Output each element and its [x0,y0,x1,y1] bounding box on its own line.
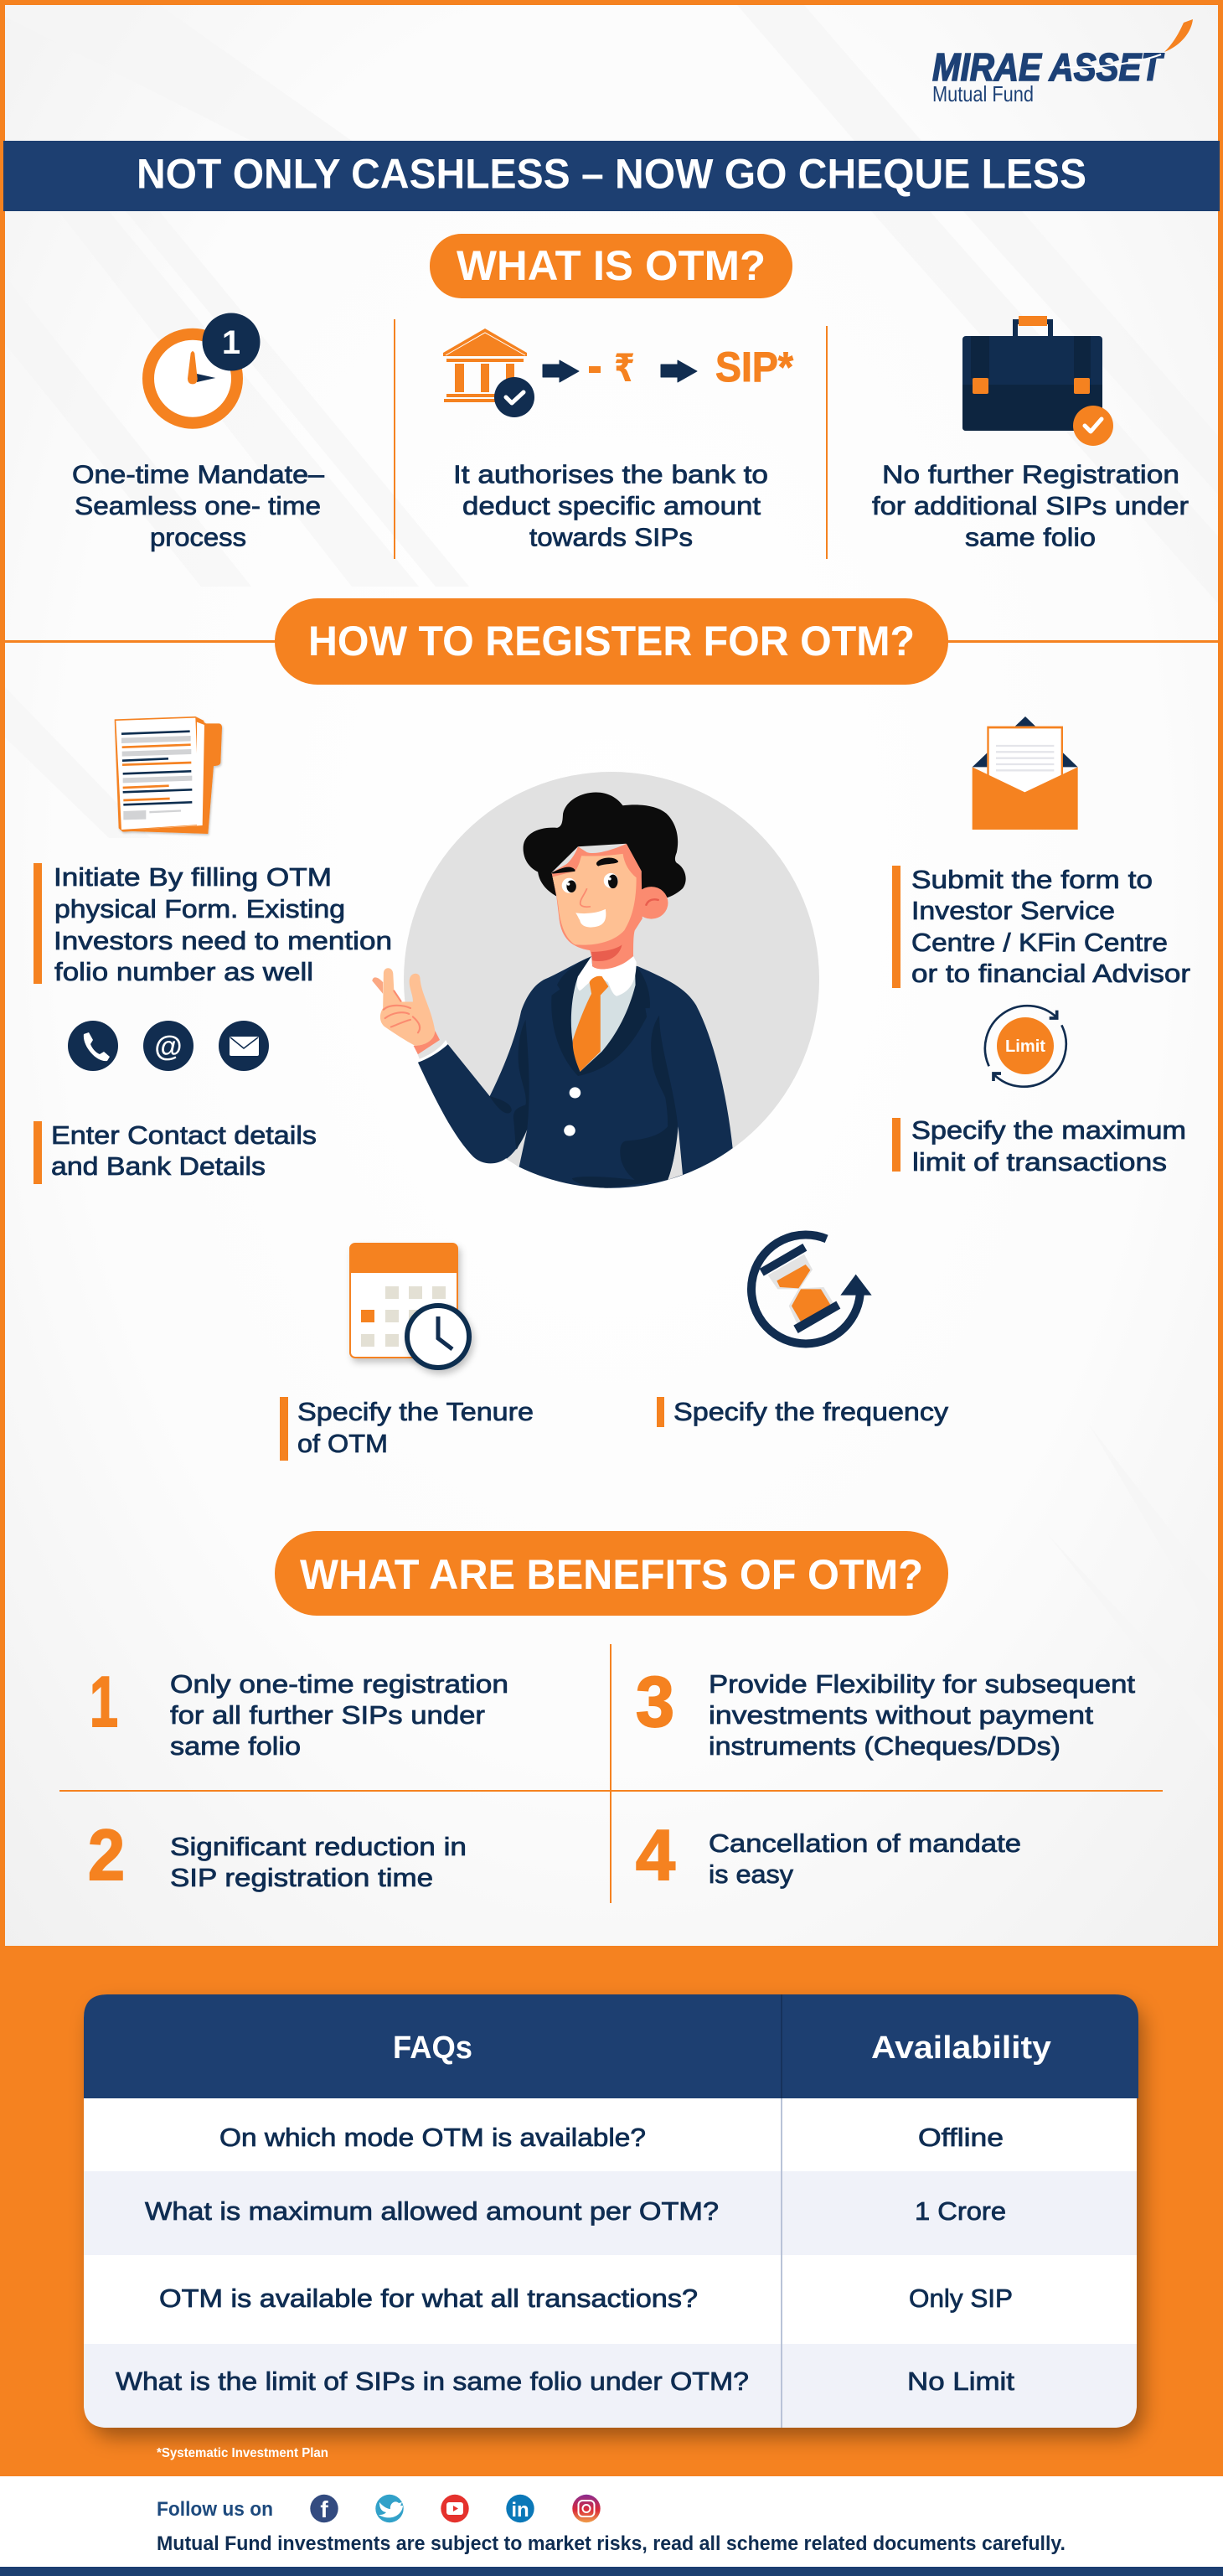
minus rupee [589,366,601,373]
benefit one: same folio [170,1731,301,1761]
benefit three: instruments (Cheques/DDs) [709,1731,1060,1761]
step: submit form: or to financial Advisor [911,959,1190,988]
jacket folds [490,1016,678,1188]
icon: bank to SIP flow: ₹ [614,345,635,391]
collar [577,956,637,996]
tie [573,976,608,1072]
step: tenure [280,1397,534,1461]
benefit three: 3 [636,1663,674,1742]
benefit one [90,1663,508,1761]
benefit two [88,1816,467,1896]
bank icon [443,328,527,402]
mail [219,1021,269,1071]
step: frequency: Specify the frequency [673,1397,949,1426]
heading: benefits: WHAT ARE BENEFITS OF OTM? [300,1551,923,1598]
benefit four: is easy [709,1860,794,1889]
divider right [826,326,828,559]
step: initiate form: folio number as well [54,957,313,986]
icon: limit: Limit [1005,1037,1045,1056]
neck shadow [591,944,622,961]
step: maximum limit: Specify the maximum [911,1115,1186,1145]
face light [553,854,637,945]
FAQ table [84,1994,1138,2428]
table body [84,1994,1137,2428]
icon: hourglass refresh [751,1234,872,1343]
icon: linkedin [506,2495,534,2522]
benefit one: Only one-time registration [170,1669,508,1699]
icon: linkedin: in [511,2499,529,2522]
FAQ table: What is maximum allowed amount per OTM? [145,2196,719,2226]
icon: limit [985,1006,1066,1087]
FAQ table: Availability [871,2030,1051,2066]
SIP label: SIP* [715,344,793,391]
eyes [562,878,576,893]
table rows: On which mode OTM is available? [219,2123,646,2152]
icon: calendar with clock [350,1244,469,1368]
logo [932,19,1193,106]
benefit three [636,1663,1135,1761]
logo wordmark: MIRAE ASSET [932,45,1164,89]
buttons [570,1087,581,1099]
icon: envelope [973,716,1078,830]
table header [84,1994,1138,2098]
step: initiate form [34,862,392,986]
step: submit form [892,865,1190,988]
icon: instagram [572,2495,601,2522]
lapels [551,956,650,1076]
text: one-time mandate: process [150,523,246,551]
smile [575,909,606,928]
FAQ table: Offline [918,2123,1004,2152]
benefit one: 1 [90,1663,118,1742]
shirt [571,962,636,1072]
step: tenure: Specify the Tenure [297,1397,534,1426]
step: submit form: Submit the form to [911,865,1153,894]
icon: facebook: f [320,2496,328,2522]
text: authorises bank: It authorises the bank to [453,459,768,489]
icon: clock with one: 1 [222,324,240,361]
divider left [394,319,395,559]
title band [3,141,1220,211]
benefit four [636,1816,1021,1896]
heading: benefits [275,1531,948,1616]
step: maximum limit: limit of transactions [912,1147,1167,1177]
footer: Mutual Fund investments are subject to market risks, read all scheme related documents carefully. [157,2532,1066,2555]
FAQ table: FAQs [393,2030,472,2066]
nose [581,888,591,907]
step: submit form: Centre / KFin Centre [911,928,1168,957]
jacket gaps [506,1126,683,1180]
benefit three: Provide Flexibility for subsequent [709,1669,1135,1699]
icon: youtube [441,2495,469,2522]
ear [634,887,668,919]
step: tenure: of OTM [297,1429,388,1458]
step: maximum limit [892,1115,1186,1177]
benefit four: Cancellation of mandate [709,1829,1021,1858]
light content panel [5,5,1218,1946]
title band: NOT ONLY CASHLESS – NOW GO CHEQUE LESS [137,151,1086,198]
benefits grid lines [59,1644,1163,1903]
FAQ table: What is the limit of SIPs in same folio under OTM? [116,2367,749,2396]
step: contact details: Enter Contact details [51,1120,317,1150]
finger folds [384,991,420,1032]
FAQ table: 1 Crore [915,2196,1006,2226]
heading: how to register [5,598,1218,685]
text: no further registration: for additional SIPs under [872,491,1189,520]
arrow two [661,360,697,382]
heading: what is OTM [430,234,792,298]
benefit three: investments without payment [709,1700,1093,1730]
FAQ table: Only SIP [909,2284,1013,2313]
icon: briefcase [962,316,1113,446]
icon: contact circles [68,1021,269,1071]
palm [380,968,435,1046]
icon: contact circles: @ [154,1031,183,1063]
wrist [414,1031,440,1054]
footnote: *Systematic Investment Plan [157,2446,328,2460]
heading: how to register: HOW TO REGISTER FOR OTM? [308,618,915,665]
text: one-time mandate [72,459,325,551]
hair [524,792,686,897]
text: no further registration [872,459,1189,551]
FAQ table: OTM is available for what all transactions? [159,2284,698,2313]
heading: what is OTM: WHAT IS OTM? [457,242,766,289]
text: one-time mandate: Seamless one- time [75,491,321,520]
benefit two: 2 [88,1816,125,1896]
icon: form document [115,716,222,834]
icon: bank to SIP flow [443,328,793,417]
cuff [416,1040,448,1063]
text: authorises bank: towards SIPs [529,523,693,551]
icon: clock with one [148,313,260,423]
text: authorises bank [453,459,768,551]
arrow one [543,360,579,382]
step: submit form: Investor Service [911,896,1115,925]
icon: facebook [310,2495,338,2522]
benefit four: 4 [636,1816,675,1896]
footer: Follow us on [157,2498,273,2521]
step: initiate form: Initiate By filling OTM [54,862,332,892]
at sign [143,1021,194,1071]
text: no further registration: same folio [965,523,1096,551]
text: authorises bank: deduct specific amount [462,491,761,520]
illustration: man in suit [372,772,819,1188]
back finger [372,977,383,994]
step: contact details [34,1120,317,1184]
footer [0,2476,1223,2576]
benefit two: SIP registration time [170,1863,433,1892]
jacket [418,956,733,1188]
logo: Mutual Fund [932,81,1034,106]
neck and face base [552,844,642,972]
step: initiate form: Investors need to mention [54,926,392,955]
benefit two: Significant reduction in [170,1832,467,1861]
brows [552,867,575,874]
grey circle [404,772,819,1187]
step: contact details: and Bank Details [51,1151,266,1181]
step: initiate form: physical Form. Existing [54,894,345,923]
text: no further registration: No further Registration [882,459,1179,489]
phone [68,1021,118,1071]
icon: twitter [375,2495,404,2522]
benefit one: for all further SIPs under [170,1700,485,1730]
FAQ table: No Limit [907,2367,1014,2396]
text: one-time mandate: One-time Mandate– [72,459,325,489]
